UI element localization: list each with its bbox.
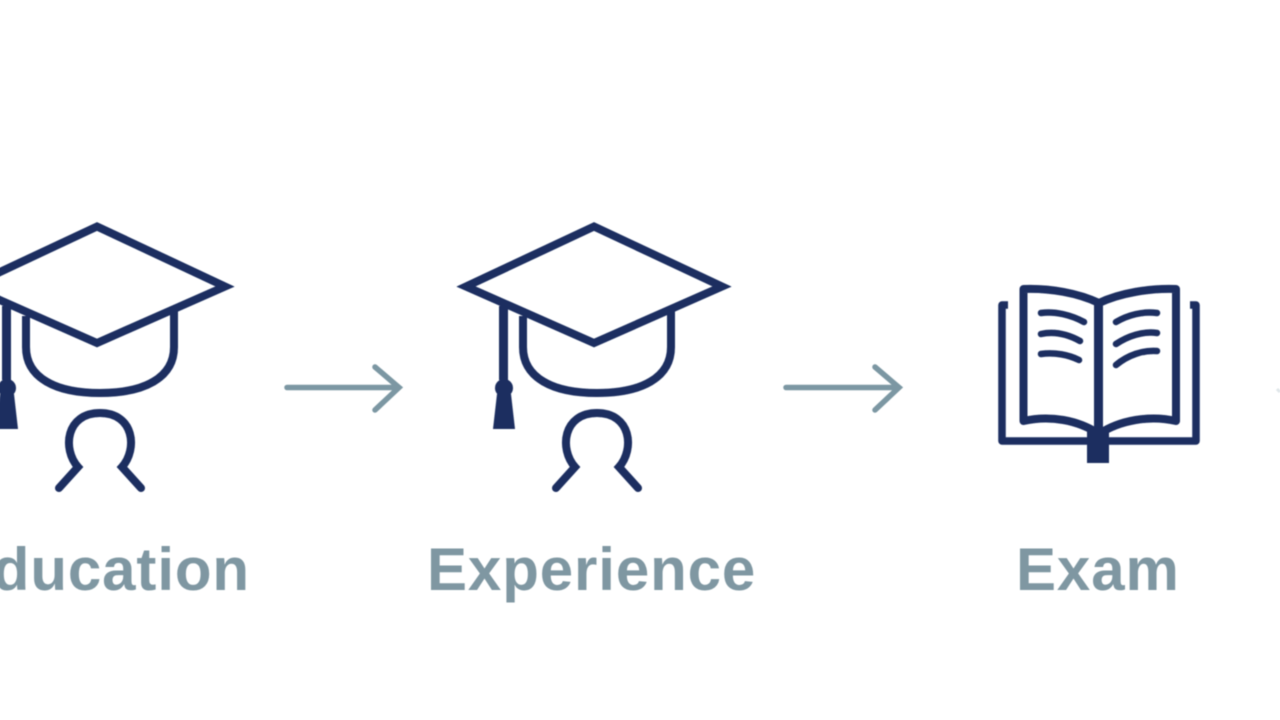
arrow: education to experience	[287, 367, 399, 410]
icon: graduate cap with person, education	[0, 226, 225, 488]
label: Experience: Experience	[427, 536, 756, 603]
arrow: next step, cropped at right edge	[1277, 389, 1280, 392]
icon: graduate cap with person, experience	[466, 226, 722, 488]
icon: open book, exam	[1002, 289, 1196, 463]
arrow: experience to exam	[786, 367, 899, 410]
label: Exam: Exam	[1016, 536, 1180, 603]
